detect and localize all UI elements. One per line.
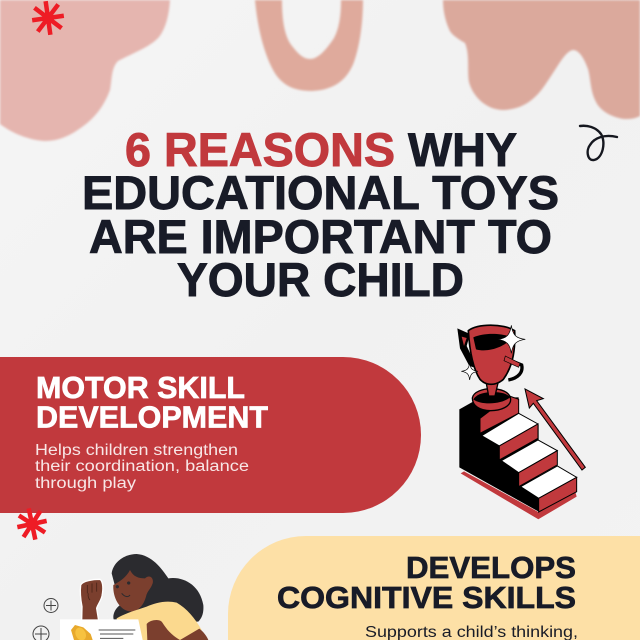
title: 6 REASONS WHY	[125, 123, 517, 176]
icon: red asterisk middle	[14, 505, 50, 543]
title: EDUCATIONAL TOYS	[82, 166, 559, 219]
body text: motor skill: Helps children strengthen	[35, 442, 238, 459]
body text: motor skill	[35, 442, 249, 492]
illustration: girl with idea card	[33, 554, 208, 640]
body text: motor skill: through play	[35, 475, 136, 492]
title: YOUR CHILD	[177, 253, 464, 306]
heading: development: DEVELOPMENT	[36, 400, 268, 434]
blob: top centre arch	[255, 0, 363, 91]
icon: plus circles	[33, 598, 58, 640]
title	[82, 123, 559, 306]
panel: develops cognitive skills	[228, 536, 640, 640]
body text: motor skill: their coordination, balance	[35, 458, 249, 475]
panel: motor skill development	[0, 357, 421, 513]
heading: develops: DEVELOPS	[406, 551, 576, 585]
title: ARE IMPORTANT TO	[89, 210, 552, 263]
blob: top left	[0, 0, 170, 141]
blob: top right	[443, 0, 640, 119]
icon: red asterisk top	[30, 0, 66, 37]
heading: motor skill: MOTOR SKILL	[36, 371, 245, 405]
girl figure	[60, 554, 208, 640]
icon: squiggle	[580, 126, 617, 160]
heading: cognitive skills: COGNITIVE SKILLS	[277, 581, 576, 615]
icon: trophy on stairs	[457, 325, 585, 519]
